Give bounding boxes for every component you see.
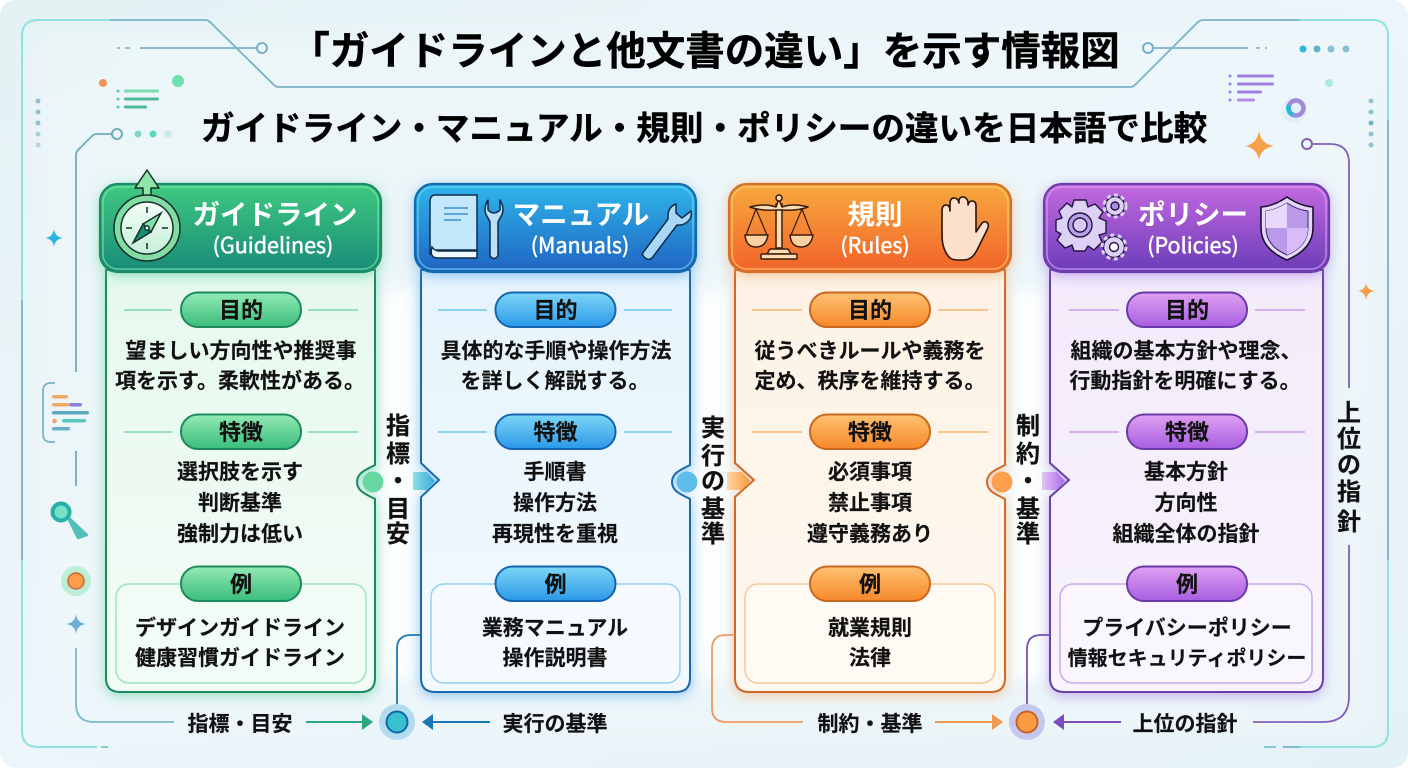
- bottom flow: guideline to manual node: 指標・目安: [188, 713, 292, 736]
- section: purpose: 従うべきルールや義務を: [754, 340, 986, 363]
- section: features: 特徴: [533, 420, 578, 445]
- panel: rules: [729, 184, 1012, 692]
- panel header: ガイドライン: [192, 192, 358, 232]
- section: purpose: [752, 292, 988, 393]
- panel header: [415, 184, 696, 272]
- bottom flow: policy label: 上位の指針: [1132, 713, 1238, 736]
- section: purpose: 目的: [533, 298, 578, 323]
- arrow: into policies: [1042, 472, 1065, 490]
- section: example: 例: [230, 572, 252, 597]
- panel body: [421, 270, 690, 692]
- section: purpose: 目的: [219, 298, 263, 323]
- icon: gray-blue sparkle: [66, 614, 86, 634]
- section: purpose: 行動指針を明確にする。: [1069, 370, 1301, 393]
- arrow: into manuals: [413, 472, 435, 490]
- section: example: 健康習慣ガイドライン: [135, 647, 345, 670]
- decoration: right top dots: [1300, 46, 1350, 52]
- section: features: 遵守義務あり: [807, 523, 933, 546]
- section: features: 再現性を重視: [492, 523, 618, 546]
- section: example: 情報セキュリティポリシー: [1068, 647, 1306, 670]
- node: green circle: [362, 472, 384, 492]
- icon: orange node: [61, 566, 91, 596]
- icon: wrench upright: [485, 200, 503, 258]
- panel body: [735, 270, 1005, 692]
- panel header: [1044, 184, 1329, 272]
- panel header: マニュアル: [513, 192, 649, 232]
- section: example: 業務マニュアル: [482, 617, 628, 640]
- section: purpose: 目的: [1165, 298, 1209, 323]
- node: blue circle: [676, 472, 698, 492]
- decoration: title connector left: [117, 43, 267, 53]
- section: features: 方向性: [1154, 492, 1218, 515]
- decoration: purple list icon: [1228, 74, 1274, 102]
- section: example: デザインガイドライン: [135, 616, 345, 640]
- section: features: 特徴: [1165, 420, 1209, 445]
- connector: policy box to node: [1027, 635, 1050, 705]
- decoration: teal dots: [134, 130, 172, 138]
- section: purpose: 項を示す。柔軟性がある。: [115, 369, 365, 393]
- bottom flow: manual label: [422, 713, 608, 736]
- node: orange junction: [1009, 704, 1045, 740]
- bottom flow: policy label: [1053, 713, 1238, 736]
- bottom flow: manual label: 実行の基準: [502, 713, 608, 736]
- icon: gears: [1056, 195, 1126, 259]
- section: purpose: 具体的な手順や操作方法: [440, 340, 672, 363]
- section: purpose: 望ましい方向性や推奨事: [126, 339, 356, 363]
- bottom flow: guideline to manual node: [188, 713, 373, 736]
- section: features: [1069, 414, 1305, 546]
- section: purpose: を詳しく解説する。: [460, 370, 650, 393]
- section: purpose: 目的: [848, 298, 892, 323]
- section: example: [745, 566, 995, 683]
- decoration: title connector right: [1143, 43, 1267, 53]
- section: example: 操作説明書: [502, 647, 608, 670]
- section: example: [1060, 566, 1312, 683]
- icon: donut chart: [1281, 97, 1307, 123]
- panel header: (Rules): [840, 229, 910, 260]
- section: purpose: [115, 292, 365, 393]
- panel header: (Manuals): [531, 229, 629, 260]
- icon: small orange sparkle: [1358, 283, 1375, 300]
- section: example: プライバシーポリシー: [1082, 617, 1292, 640]
- panel header: (Policies): [1147, 229, 1239, 260]
- panel body: [1050, 270, 1323, 692]
- section: features: 特徴: [219, 420, 263, 445]
- icon: wrench diagonal: [642, 204, 691, 259]
- icon: magnifier: [52, 504, 87, 538]
- connector: manual box to node: [397, 635, 421, 705]
- bottom flow: rules label: [818, 713, 1003, 736]
- panel header: [729, 184, 1011, 272]
- section: features: 強制力は低い: [177, 523, 303, 546]
- icon: shield: [1261, 197, 1313, 260]
- section: purpose: 定め、秩序を維持する。: [754, 370, 986, 393]
- icon: scales: [745, 195, 813, 259]
- icon: book: [430, 195, 477, 258]
- bottom flow: rules label: 制約・基準: [818, 713, 922, 736]
- connector: right purple circuit: [1253, 139, 1349, 722]
- label: vertical 制約・基準: 制約・基準: [1016, 413, 1040, 548]
- node: orange circle: [992, 472, 1012, 492]
- panel header: 規則: [848, 192, 902, 232]
- section: example: 法律: [849, 647, 891, 670]
- icon: raised hand: [942, 197, 988, 260]
- subtitle: ガイドライン・マニュアル・規則・ポリシーの違いを日本語で比較: [201, 101, 1207, 150]
- panel: policies: [1044, 184, 1329, 692]
- connector: rules box to flow: [712, 635, 803, 722]
- section: features: 組織全体の指針: [1112, 523, 1260, 546]
- section: example: 例: [1176, 572, 1198, 597]
- section: features: [124, 414, 358, 546]
- section: features: [752, 414, 988, 546]
- connector: left circuit to guideline label: [76, 129, 174, 722]
- decoration: top left list icon: [99, 75, 184, 108]
- node: teal junction: [379, 704, 415, 740]
- label: vertical 上位の指針: 上位の指針: [1337, 400, 1361, 536]
- section: features: 判断基準: [198, 492, 282, 515]
- section: purpose: 組織の基本方針や理念、: [1070, 340, 1302, 363]
- panel header: ポリシー: [1138, 192, 1248, 232]
- section: features: 基本方針: [1144, 461, 1228, 484]
- gap glows: [380, 290, 1046, 680]
- panel: guidelines: [100, 170, 384, 692]
- section: features: 操作方法: [513, 492, 597, 515]
- label: vertical 実行の基準: 実行の基準: [701, 415, 725, 548]
- section: features: 必須事項: [828, 460, 912, 484]
- icon: compass: [114, 170, 180, 261]
- icon: document bracket: [43, 383, 89, 442]
- arrow: into rules: [727, 472, 750, 490]
- section: example: [431, 566, 680, 683]
- label: vertical 指標・目安: 指標・目安: [386, 413, 410, 548]
- section: purpose: [1069, 292, 1305, 393]
- section: features: 手順書: [524, 461, 586, 484]
- decoration: right dot column: [1368, 98, 1374, 148]
- section: example: 例: [859, 572, 881, 597]
- decoration: left dot column: [36, 98, 40, 148]
- panel header: (Guidelines): [213, 229, 333, 260]
- icon: orange sparkle: [1245, 131, 1274, 160]
- section: example: [116, 566, 366, 683]
- section: features: 選択肢を示す: [177, 461, 303, 484]
- section: purpose: [438, 292, 672, 393]
- decoration: mint dot: [1325, 79, 1333, 87]
- section: features: 禁止事項: [828, 491, 912, 515]
- title: 「ガイドラインと他文書の違い」を示す情報図: [290, 20, 1120, 77]
- icon: blue sparkle: [45, 229, 63, 247]
- section: features: 特徴: [848, 420, 892, 445]
- section: example: 就業規則: [828, 617, 912, 640]
- section: features: [438, 414, 672, 546]
- section: example: 例: [544, 572, 567, 597]
- panel header: [100, 184, 381, 272]
- panel body: [106, 270, 375, 692]
- panel: manuals: [415, 184, 698, 692]
